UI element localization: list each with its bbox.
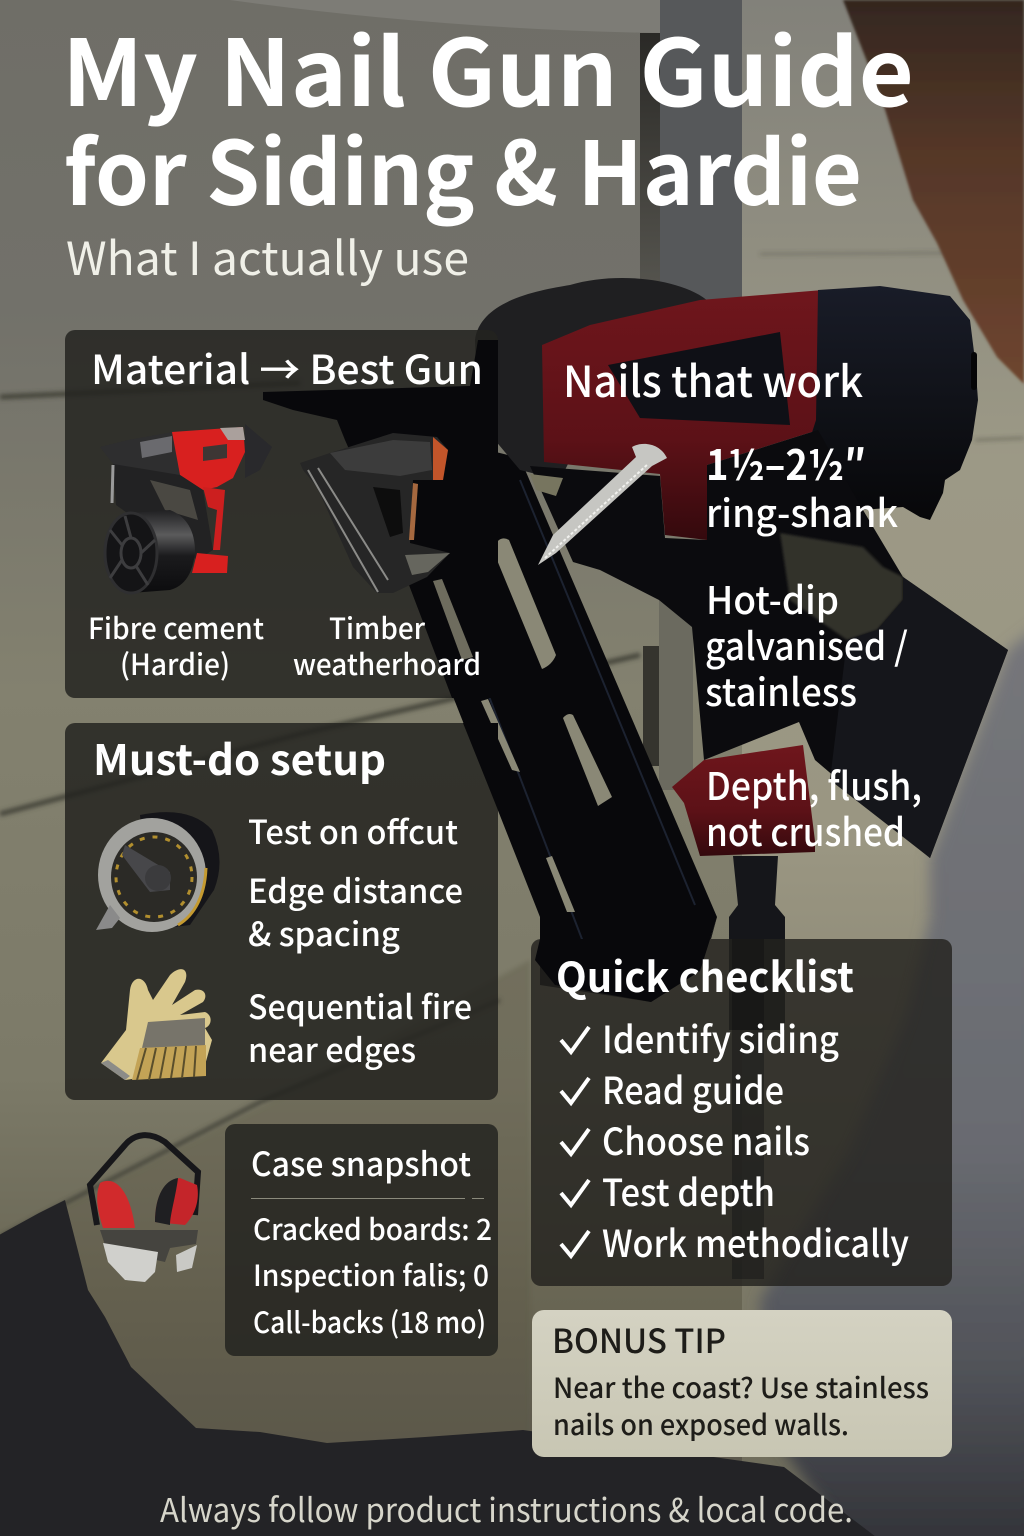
top glove <box>475 278 712 480</box>
checklist items: Read guide <box>602 1061 784 1115</box>
panel: must-do setup <box>65 723 498 1100</box>
panel: case snapshot <box>225 1124 498 1356</box>
checklist text: setup steps: Test on offcut <box>248 806 458 854</box>
nail coating: Hot-dip <box>706 570 839 625</box>
check marks <box>561 1027 589 1256</box>
panel heading: Case snapshot <box>251 1138 471 1186</box>
section: nails that work <box>538 348 922 857</box>
callout text <box>553 1367 929 1444</box>
checklist text: setup steps: Sequential fire <box>248 981 472 1029</box>
red glove wrist <box>672 745 815 856</box>
callout: bonus tip <box>532 1310 952 1457</box>
case stats: Call-backs (18 mo) <box>253 1300 486 1342</box>
gun hose fitting <box>729 856 785 1030</box>
checklist items: Identify siding <box>602 1010 839 1064</box>
nail size <box>706 432 898 538</box>
nail depth <box>706 756 922 857</box>
nail depth: Depth, flush, <box>706 756 922 811</box>
checklist items: Choose nails <box>602 1112 810 1166</box>
case stats: Cracked boards: 2 <box>253 1207 492 1249</box>
icon: depth dial <box>96 812 220 932</box>
title: My Nail Gun Guide <box>62 0 914 133</box>
gun rear cap <box>800 286 978 520</box>
callout text: Near the coast? Use stainless <box>553 1367 929 1407</box>
subtitle: What I actually use <box>66 223 469 289</box>
nail coating <box>705 570 908 717</box>
label: fibre cement: Fibre cement <box>88 606 264 648</box>
checklist items: Work methodically <box>602 1214 909 1268</box>
panel: material to best gun <box>65 330 498 698</box>
icon: framing nailer, black and orange <box>300 433 450 593</box>
icon: ear muffs and safety glasses <box>90 1135 198 1282</box>
checklist text: setup steps: & spacing <box>248 908 400 956</box>
label: timber weatherboard: Timber <box>329 606 425 648</box>
panel heading: Material → Best Gun <box>91 338 483 396</box>
checklist text: setup steps: near edges <box>248 1024 416 1072</box>
nail depth: not crushed <box>706 802 905 857</box>
checklist text: setup steps <box>248 806 472 1072</box>
worker lower arm <box>0 1200 880 1536</box>
nail coating: galvanised / <box>705 616 908 671</box>
label: timber weatherboard: weatherhoard <box>293 642 481 684</box>
footer disclaimer: Always follow product instructions & local code. <box>160 1484 853 1532</box>
case stats: Inspection falis; 0 <box>253 1253 489 1295</box>
icon: ring-shank nail <box>538 444 667 565</box>
vertical post and shadow <box>660 0 742 320</box>
title: for Siding & Hardie <box>64 104 862 231</box>
worker head <box>843 0 1024 384</box>
icon: work gloves and nails <box>101 969 212 1080</box>
panel heading: Quick checklist <box>556 944 854 1004</box>
heading: Nails that work <box>563 348 863 410</box>
case stats <box>253 1207 492 1342</box>
callout heading: BONUS TIP <box>552 1315 726 1363</box>
worker sleeve <box>760 625 1024 1536</box>
panel: quick checklist <box>531 917 952 1286</box>
title <box>62 0 914 231</box>
nail coating: stainless <box>705 662 857 717</box>
callout text: nails on exposed walls. <box>553 1404 849 1444</box>
magazine of nail gun <box>345 415 717 1002</box>
nail size: 1½–2½″ <box>706 432 866 493</box>
label: fibre cement <box>88 606 264 684</box>
panel heading: Must-do setup <box>93 727 386 788</box>
gun body, red <box>542 290 823 540</box>
label: timber weatherboard <box>293 606 481 684</box>
checklist items <box>602 1010 909 1268</box>
nail size: ring-shank <box>706 483 898 538</box>
checklist items: Test depth <box>602 1163 775 1217</box>
checklist text: setup steps: Edge distance <box>248 865 463 913</box>
icon: coil roofing nailer, red <box>100 424 272 593</box>
label: fibre cement: (Hardie) <box>120 642 230 684</box>
hand and cuff <box>530 430 1008 858</box>
